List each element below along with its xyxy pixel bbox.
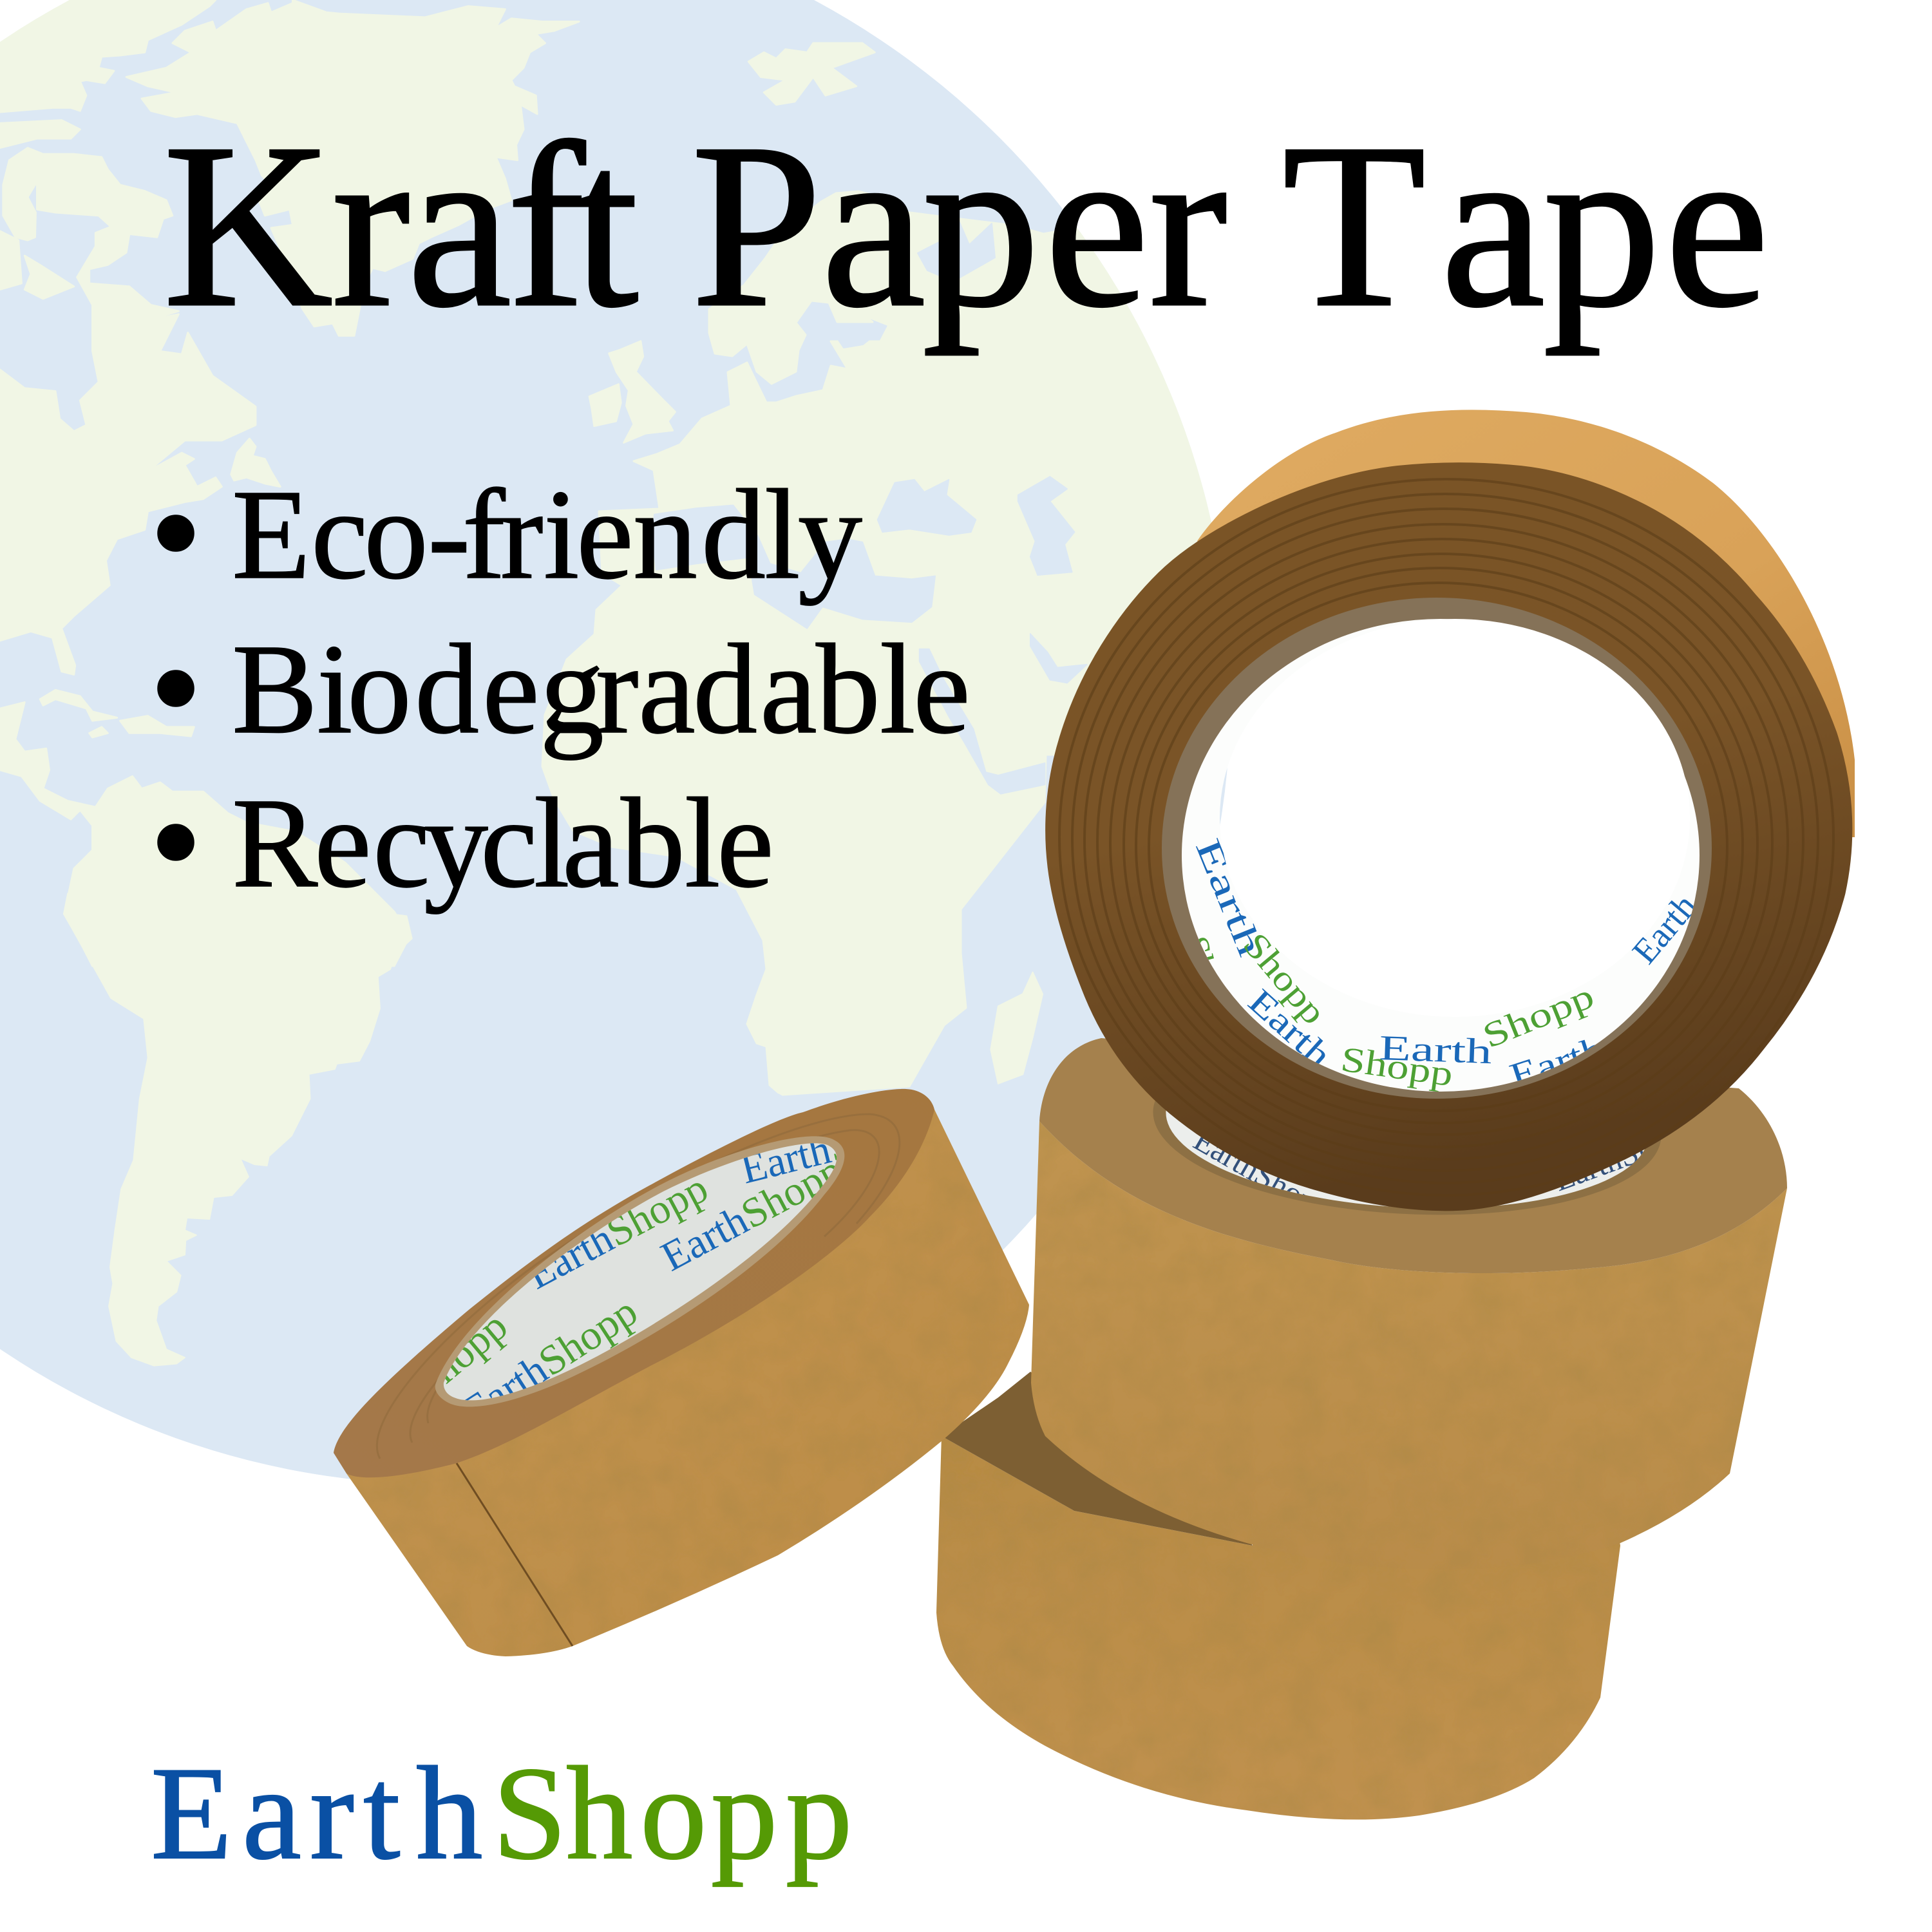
side wall <box>1031 1121 1787 1569</box>
liner print: Earth <box>1624 887 1704 971</box>
tape roll: middle of stack <box>1031 1021 1787 1569</box>
side wall <box>936 1436 1620 1819</box>
land: south america <box>0 703 410 966</box>
liner print: EarthShopp <box>455 1288 646 1435</box>
liner print: Shopp <box>1477 976 1599 1056</box>
liner print: EarthShopp <box>1549 1112 1704 1198</box>
seam <box>457 1463 573 1646</box>
liner print <box>1188 1112 1704 1229</box>
printed liner <box>444 1143 837 1400</box>
outer paper rim <box>1197 410 1855 837</box>
logo: EarthShopp <box>151 1739 853 1887</box>
wound rings <box>377 1114 900 1459</box>
liner print: EarthShopp <box>736 1100 939 1193</box>
panel: globe background <box>0 0 1288 1484</box>
feature list <box>158 464 971 914</box>
liner print: EarthShopp <box>654 1147 850 1280</box>
paper core <box>1162 598 1712 1099</box>
end face <box>334 1089 934 1477</box>
land: greenland <box>126 0 579 336</box>
liner print: Earth <box>1505 1028 1609 1095</box>
bullet: biodegradable: Biodegradable <box>232 618 971 761</box>
bullet: eco-friendly: Eco-friendly <box>232 464 862 606</box>
liner print: Shopp <box>1176 932 1238 1030</box>
liner print: EarthShopp <box>1188 1121 1338 1229</box>
title: KraftPaperTape <box>163 95 1769 356</box>
tape roll: left lying <box>334 1089 1029 1656</box>
liner print: Shopp <box>1236 925 1334 1032</box>
top face <box>1039 1038 1787 1273</box>
land: arctic and north america <box>0 0 280 737</box>
world land masses <box>0 0 1288 1366</box>
logo: EarthShopp: Shopp <box>493 1739 853 1887</box>
wound rings <box>1059 479 1833 1195</box>
land: iceland <box>748 43 875 105</box>
sea: black, caspian, red and gulfs <box>877 477 1087 794</box>
paper core <box>1148 1021 1666 1227</box>
liner print: EarthShopp <box>519 1165 715 1298</box>
liner print: Shopp <box>1338 1039 1455 1094</box>
liner print: EarthShopp <box>335 1303 516 1465</box>
globe seen through hole <box>1159 580 1288 1030</box>
side wall <box>346 1110 1029 1656</box>
tape roll: bottom of stack <box>936 1372 1620 1819</box>
inland seas <box>653 222 1087 794</box>
liner print: Earth <box>1241 981 1339 1075</box>
land: britain <box>589 341 1043 1083</box>
printed liner <box>1162 1028 1653 1220</box>
sea: white sea and gulf of finland <box>918 222 995 281</box>
liner print: Earth <box>1188 833 1271 961</box>
liner print: Earth <box>1379 1028 1493 1071</box>
ocean disc <box>0 0 1105 1479</box>
wound end face <box>1045 462 1852 1211</box>
liner print <box>335 1100 939 1465</box>
tape roll: standing on top <box>1045 410 1855 1211</box>
bullet: recyclable: Recyclable <box>232 772 774 914</box>
printed liner <box>1182 619 1700 1092</box>
sea: mediterranean <box>653 505 935 629</box>
top face <box>942 1372 1253 1546</box>
logo: EarthShopp: Earth <box>151 1739 483 1887</box>
paper core edge <box>435 1136 844 1406</box>
liner print <box>1176 833 1704 1095</box>
see-through hole <box>1159 580 1690 1030</box>
land: eurasia and africa <box>542 191 1288 1095</box>
